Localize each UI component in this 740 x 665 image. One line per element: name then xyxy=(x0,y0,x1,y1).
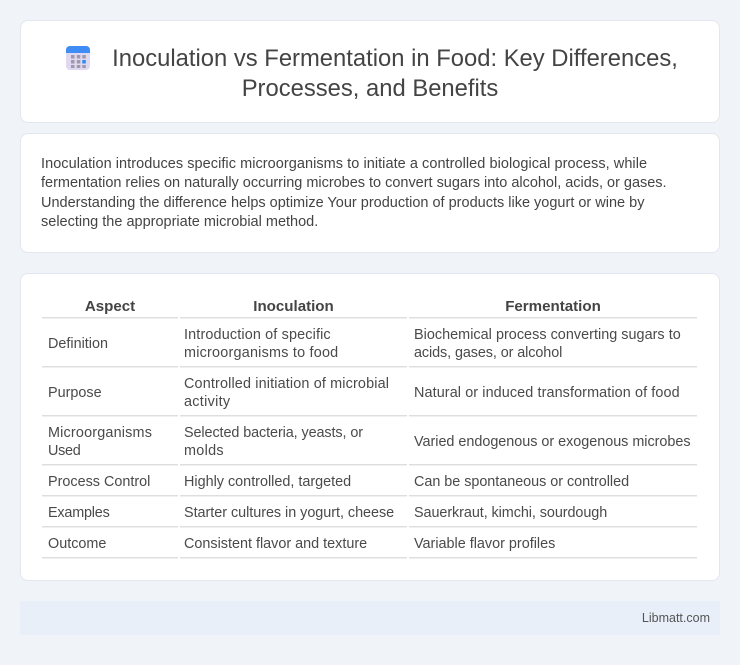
table: comparison: Controlled initiation of microbial xyxy=(184,376,389,392)
title xyxy=(112,45,678,102)
header: Aspect: Aspect xyxy=(85,298,135,314)
table: comparison: Variable flavor profiles xyxy=(414,536,555,552)
table: comparison xyxy=(42,298,697,559)
row: Outcome: Outcome xyxy=(48,536,106,552)
table: comparison: Highly controlled, targeted xyxy=(184,474,351,490)
footer: source: Libmatt.com xyxy=(642,611,710,625)
title: Processes, and Benefits xyxy=(242,75,498,102)
panel: comparison table xyxy=(20,273,720,581)
table: comparison: Starter cultures in yogurt, cheese xyxy=(184,505,394,521)
row: Definition: Definition xyxy=(48,336,108,352)
footer bar xyxy=(20,601,720,635)
icon: calendar xyxy=(66,46,90,70)
text block: introduction: Inoculation introduces specific microorganisms to initiate a controlled biological process, while xyxy=(41,156,647,172)
panel: introduction xyxy=(20,133,720,253)
table: comparison: Natural or induced transformation of food xyxy=(414,385,680,401)
header: Fermentation: Fermentation xyxy=(505,298,601,314)
title: Inoculation vs Fermentation in Food: Key Differences, xyxy=(112,45,678,72)
text block: introduction: fermentation relies on naturally occurring microbes to convert sugars into alcohol, acids, or gases. xyxy=(41,175,667,191)
row: Microorganisms Used: Used xyxy=(48,443,80,459)
table: comparison: Can be spontaneous or controlled xyxy=(414,474,629,490)
text block: introduction xyxy=(41,156,667,230)
table: comparison: molds xyxy=(184,443,224,459)
table: comparison: Selected bacteria, yeasts, or xyxy=(184,425,363,441)
table: comparison: Sauerkraut, kimchi, sourdough xyxy=(414,505,607,521)
row: Microorganisms Used: Microorganisms xyxy=(48,425,152,441)
table: comparison: Biochemical process converting sugars to xyxy=(414,327,681,343)
row: Examples: Examples xyxy=(48,505,110,521)
text block: introduction: selecting the appropriate microbial method. xyxy=(41,214,318,230)
text block: introduction: Understanding the difference helps optimize Your production of products like yogurt or wine by xyxy=(41,195,644,211)
table: comparison: Varied endogenous or exogenous microbes xyxy=(414,434,691,450)
panel: title xyxy=(20,20,720,123)
header: Inoculation: Inoculation xyxy=(253,298,334,314)
table: comparison: acids, gases, or alcohol xyxy=(414,345,562,361)
row: Process Control: Process Control xyxy=(48,474,150,490)
table: comparison: Introduction of specific xyxy=(184,327,331,343)
row: Purpose: Purpose xyxy=(48,385,102,401)
table: comparison: Consistent flavor and texture xyxy=(184,536,367,552)
table: comparison: activity xyxy=(184,394,230,410)
table: comparison: microorganisms to food xyxy=(184,345,338,361)
row: Microorganisms Used xyxy=(48,425,152,459)
